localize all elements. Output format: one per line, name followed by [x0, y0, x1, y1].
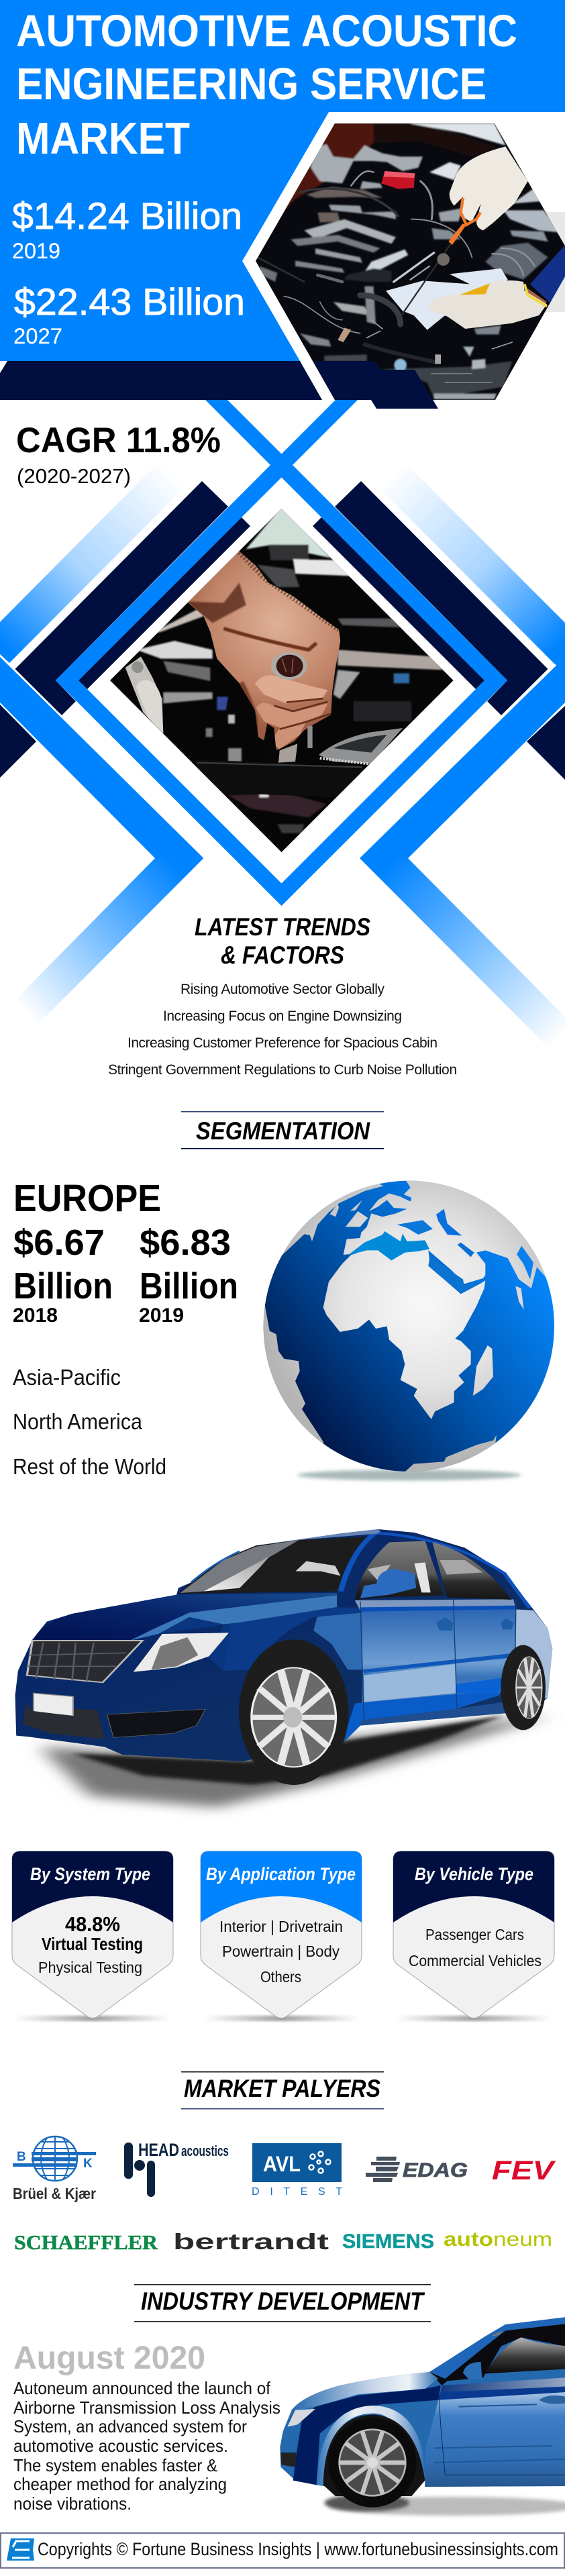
CAGR callout: CAGR 11.8%: [16, 421, 221, 460]
logo: EDAG: [366, 2157, 468, 2182]
trends list: Rising Automotive Sector Globally: [181, 982, 385, 997]
market size 2027: $22.43 Billion: [14, 280, 245, 323]
heading: latest trends and factors: & FACTORS: [221, 941, 344, 969]
icon: Fortune Business Insights logo: [7, 2538, 34, 2561]
2018 figure: $6.67: [13, 1223, 105, 1263]
2018 figure: [13, 1223, 113, 1327]
logo: Bruel and Kjaer: B: [17, 2150, 26, 2164]
segment card: system type: 48.8%: [65, 1912, 120, 1936]
August 2020 development: August 2020: [13, 2340, 205, 2376]
gray backdrop behind photo: [546, 212, 565, 312]
logo: Bruel and Kjaer: K: [83, 2157, 93, 2171]
fender light arch: [317, 2406, 425, 2486]
large dark bands: [15, 481, 228, 715]
2019 figure: $6.83: [140, 1223, 231, 1263]
dark overlay on photo corner: [313, 361, 438, 409]
market size 2019: [12, 195, 242, 263]
trends list: Increasing Customer Preference for Spacious Cabin: [127, 1035, 438, 1051]
lower glove: [428, 280, 547, 329]
land: Europe, Asia and Arabia: [344, 1179, 557, 1288]
other regions list: Rest of the World: [13, 1454, 166, 1479]
land: Madagascar: [473, 1345, 493, 1396]
red oil cap: [381, 171, 415, 189]
grille: [27, 1641, 142, 1682]
segment card: system type: Physical Testing: [38, 1959, 142, 1976]
heading: segmentation: SEGMENTATION: [196, 1117, 370, 1145]
Europe market figures: [13, 1177, 238, 1327]
photo: mechanic checking engine oil: [248, 114, 565, 405]
blue sleeve: [530, 245, 565, 303]
roof and pillars: [340, 1532, 376, 1592]
logo: Autoneum: auto neum: [444, 2228, 552, 2251]
inland seas: [348, 1209, 533, 1294]
hood: [34, 1593, 337, 1641]
CAGR callout: [16, 421, 221, 488]
belt stripes: [441, 2377, 565, 2392]
land: Africa: [323, 1250, 485, 1419]
hood: [291, 2372, 438, 2411]
description text: Autoneum announced the launch of: [13, 2378, 271, 2398]
trends list: Increasing Focus on Engine Downsizing: [163, 1009, 402, 1024]
wheel arch: [323, 2414, 425, 2496]
left chevron: [0, 657, 203, 858]
door panel: [425, 2392, 565, 2487]
segment card: vehicle type: [393, 1851, 554, 2021]
market size 2027: 2027: [13, 324, 62, 348]
logo: AVL Ditest: D I T E S T: [252, 2186, 342, 2198]
hoses and engine wiring: [257, 171, 535, 382]
heading: industry development: INDUSTRY DEVELOPMENT: [141, 2287, 425, 2315]
inner dark bands: [79, 517, 250, 689]
small car illustration: [280, 2317, 565, 2516]
car illustration: [15, 1529, 552, 1807]
segment card: system type: Virtual Testing: [42, 1934, 143, 1954]
wheel: [328, 2418, 417, 2508]
car body: [280, 2317, 565, 2487]
oil dipstick handle: [401, 198, 480, 315]
logo: AVL Ditest: AVL: [263, 2152, 301, 2176]
logo: HEAD acoustics: acoustics: [181, 2143, 229, 2159]
segment card: system type: By System Type: [30, 1864, 150, 1884]
2018 figure: 2018: [13, 1304, 58, 1327]
side mirror: [463, 2362, 482, 2380]
licence plate: [34, 1693, 73, 1716]
title: MARKET: [16, 113, 190, 164]
segment card: application type: Powertrain | Body: [222, 1943, 340, 1960]
title: AUTOMOTIVE ACOUSTIC: [16, 6, 517, 56]
segment card: application type: By Application Type: [206, 1864, 356, 1884]
headlight: [134, 1633, 229, 1672]
heading: latest trends and factors: [195, 913, 370, 969]
logo: EDAG: EDAG: [403, 2159, 468, 2181]
logo: Bruel and Kjaer: [13, 2136, 96, 2202]
title: ENGINEERING SERVICE: [16, 59, 486, 109]
car body: [15, 1529, 552, 1761]
heading: market players: MARKET PALYERS: [184, 2075, 380, 2102]
roof and window frame: [429, 2324, 565, 2385]
segment card: system type: [12, 1851, 173, 2021]
logo: HEAD acoustics: [124, 2140, 229, 2197]
photo: hand with socket wrench: [107, 507, 456, 856]
side windows: [355, 1541, 444, 1600]
description text: automotive acoustic services.: [13, 2436, 228, 2456]
wrist: [527, 289, 547, 303]
navy fender: [293, 2385, 441, 2485]
headlight: [287, 2409, 315, 2427]
land: South America: [263, 1306, 323, 1444]
arm and hand: [188, 551, 341, 750]
upper glove: [450, 146, 528, 230]
August 2020 development: [13, 2340, 280, 2514]
footer bar: [1, 2533, 564, 2568]
car shadow: [324, 2494, 565, 2516]
segment card: application type: Interior | Drivetrain: [219, 1918, 343, 1935]
description text: The system enables faster &: [13, 2455, 217, 2475]
rear wheel: [501, 1645, 546, 1730]
silver pipe: [125, 656, 163, 735]
description text: System, an advanced system for: [13, 2416, 247, 2436]
other regions list: North America: [13, 1409, 143, 1434]
gradient bands: [0, 462, 187, 663]
corner triangles: [0, 705, 36, 778]
logo: Bruel and Kjaer: Brüel & Kjær: [13, 2185, 96, 2202]
other regions list: Asia-Pacific: [13, 1365, 121, 1390]
logo: AVL Ditest: [252, 2143, 342, 2198]
trends list: [108, 982, 457, 1078]
other regions list: [13, 1365, 166, 1479]
front wheel: [239, 1639, 348, 1785]
side mirror: [360, 1569, 416, 1598]
dark band below stats: [0, 361, 322, 400]
diamond graphic: [0, 400, 565, 1047]
land: Antarctica: [405, 1435, 497, 1472]
door panels: [362, 1608, 515, 1719]
description text: cheaper method for analyzing: [13, 2474, 227, 2494]
engine hose and black cover: [319, 728, 403, 764]
logo: Schaeffler: SCHAEFFLER: [14, 2230, 158, 2254]
Europe market figures: EUROPE: [13, 1177, 161, 1220]
windshield: [178, 1537, 371, 1594]
car shadow: [40, 1716, 552, 1807]
segment card: vehicle type: By Vehicle Type: [415, 1864, 533, 1884]
description text: noise vibrations.: [13, 2493, 132, 2514]
description text: [13, 2378, 280, 2514]
2018 figure: Billion: [13, 1265, 113, 1306]
segment card: application type: Others: [260, 1968, 301, 1986]
door line and handle: [439, 2385, 565, 2475]
2019 figure: 2019: [139, 1304, 184, 1327]
globe illustration: [262, 1179, 557, 1480]
side window: [483, 2337, 565, 2377]
logo: Bertrandt: bertrandt: [173, 2229, 329, 2254]
blue diamond frame: [56, 400, 507, 906]
2019 figure: [139, 1223, 238, 1327]
market size 2019: 2019: [12, 239, 60, 263]
land: northwest peninsulas: [350, 1200, 362, 1211]
heading: latest trends and factors: LATEST TRENDS: [195, 913, 370, 941]
segment card: vehicle type: Passenger Cars: [425, 1926, 524, 1943]
trends list: Stringent Government Regulations to Curb Noise Pollution: [108, 1062, 457, 1078]
segment card: vehicle type: Commercial Vehicles: [409, 1952, 542, 1969]
logo: FEV: FEV: [492, 2156, 556, 2185]
right chevron: [360, 657, 565, 858]
socket: [271, 652, 307, 680]
logo: HEAD acoustics: HEAD: [138, 2140, 179, 2160]
rag under hand: [386, 268, 508, 330]
market size 2027: [13, 280, 245, 348]
market size 2019: $14.24 Billion: [12, 195, 242, 237]
land: Greenland rim: [282, 1184, 384, 1255]
title: [16, 6, 517, 164]
description text: Airborne Transmission Loss Analysis: [13, 2398, 280, 2418]
header panel: [0, 0, 565, 409]
2019 figure: Billion: [140, 1265, 238, 1306]
segment card: application type: [201, 1851, 362, 2021]
land: Sri Lanka: [515, 1286, 524, 1310]
lower intakes: [23, 1704, 105, 1739]
CAGR callout: (2020-2027): [17, 464, 131, 488]
logo: Siemens: SIEMENS: [342, 2230, 434, 2253]
